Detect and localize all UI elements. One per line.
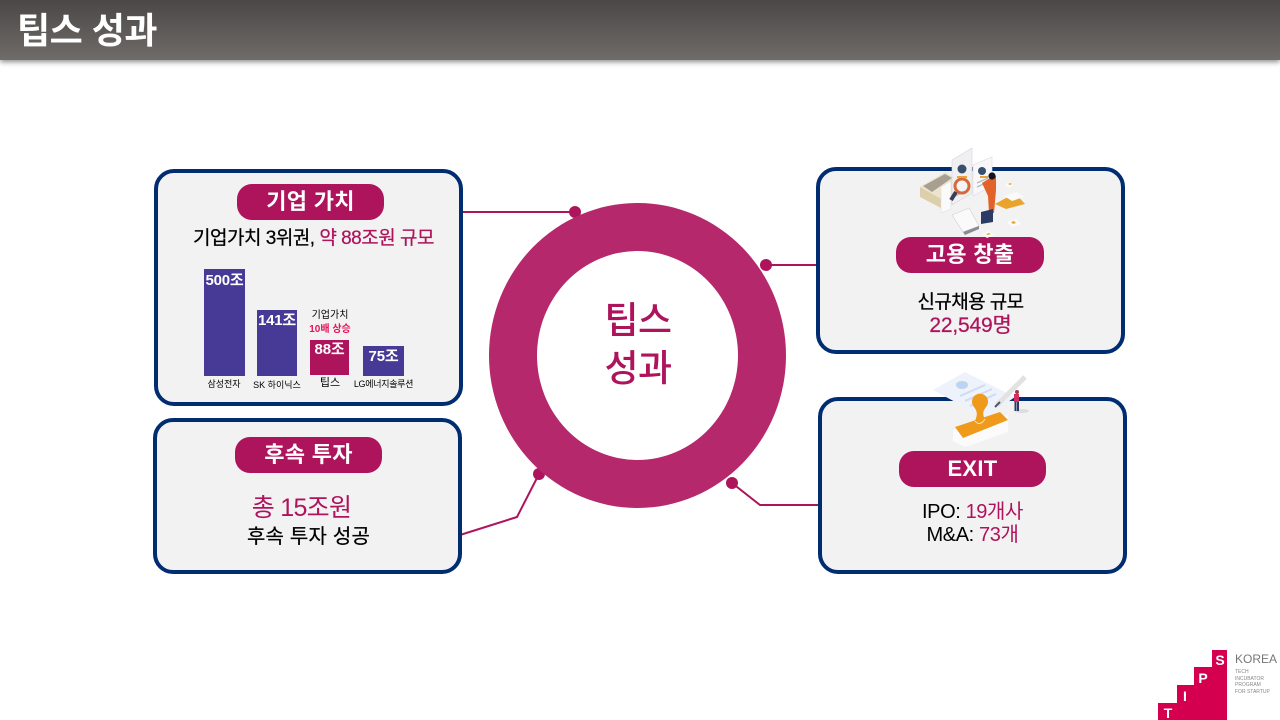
panel: employment: [816, 167, 1125, 354]
center ring: [489, 203, 786, 508]
icon: resumes illustration: [920, 148, 1025, 238]
panel: follow-on investment: [153, 418, 462, 574]
annotation: 기업가치: [312, 310, 348, 321]
bar: Samsung: 500조: [205, 272, 244, 289]
bar: LG Energy Solution: 75조: [369, 348, 398, 365]
logo tagline: FOR STARTUP: [1235, 688, 1270, 694]
annotation: [309, 309, 351, 335]
logo stairs: [1158, 650, 1227, 720]
label: Samsung: 삼성전자: [207, 379, 241, 389]
panel: company value: [154, 169, 463, 406]
logo tagline: INCUBATOR: [1235, 676, 1264, 682]
heading pill: 후속 투자: [264, 442, 353, 467]
amount: 총 15조원: [252, 494, 351, 522]
bar: TIPS: 88조: [315, 341, 344, 358]
bar: SK hynix: 141조: [258, 312, 296, 329]
hires text: 신규채용 규모: [918, 292, 1023, 313]
center label: [604, 300, 672, 389]
heading pill: 기업 가치: [266, 189, 355, 214]
connector: exit: [726, 477, 820, 505]
exit text: [922, 501, 1023, 546]
hires text: [918, 292, 1024, 337]
connector: company value: [460, 206, 581, 218]
bar: Samsung: [204, 269, 245, 376]
heading pill: [237, 184, 384, 220]
logo tagline: [1235, 669, 1270, 694]
connector: employment: [760, 259, 820, 271]
bar chart: [204, 269, 413, 390]
summary text: 기업가치 3위권, 약 88조원 규모: [193, 228, 434, 249]
heading pill: 고용 창출: [926, 242, 1014, 267]
header bar: [0, 0, 1280, 60]
exit text: IPO: 19개사: [922, 501, 1023, 523]
panel: exit: [818, 397, 1127, 574]
heading pill: [899, 451, 1046, 487]
connector: follow-on investment: [460, 468, 545, 535]
icon: stamp illustration: [934, 372, 1029, 446]
logo tagline: TECH: [1235, 669, 1249, 675]
description: 후속 투자 성공: [247, 526, 370, 548]
bar: SK hynix: [257, 310, 297, 376]
exit text: M&A: 73개: [927, 524, 1018, 546]
logo letters: P: [1198, 670, 1208, 686]
heading pill: EXIT: [947, 456, 998, 481]
logo tagline: PROGRAM: [1235, 682, 1261, 688]
heading pill: [896, 237, 1044, 273]
hires text: 22,549명: [929, 314, 1012, 337]
logo letters: I: [1183, 688, 1187, 704]
logo: [1158, 650, 1277, 720]
center label: 성과: [604, 348, 672, 389]
logo letters: S: [1215, 652, 1225, 668]
logo wordmark: KOREA: [1235, 652, 1277, 666]
label: LG: LG에너지솔루션: [354, 379, 413, 389]
logo letters: [1164, 652, 1225, 720]
title: 팁스 성과: [17, 10, 157, 51]
label: TIPS: 팁스: [320, 377, 340, 389]
annotation: 10배 상승: [309, 324, 351, 335]
center label: 팁스: [604, 300, 672, 341]
bar: LG Energy Solution: [363, 346, 404, 376]
heading pill: [235, 437, 382, 473]
bar: TIPS: [310, 340, 349, 375]
label: SK hynix: SK 하이닉스: [253, 380, 301, 390]
